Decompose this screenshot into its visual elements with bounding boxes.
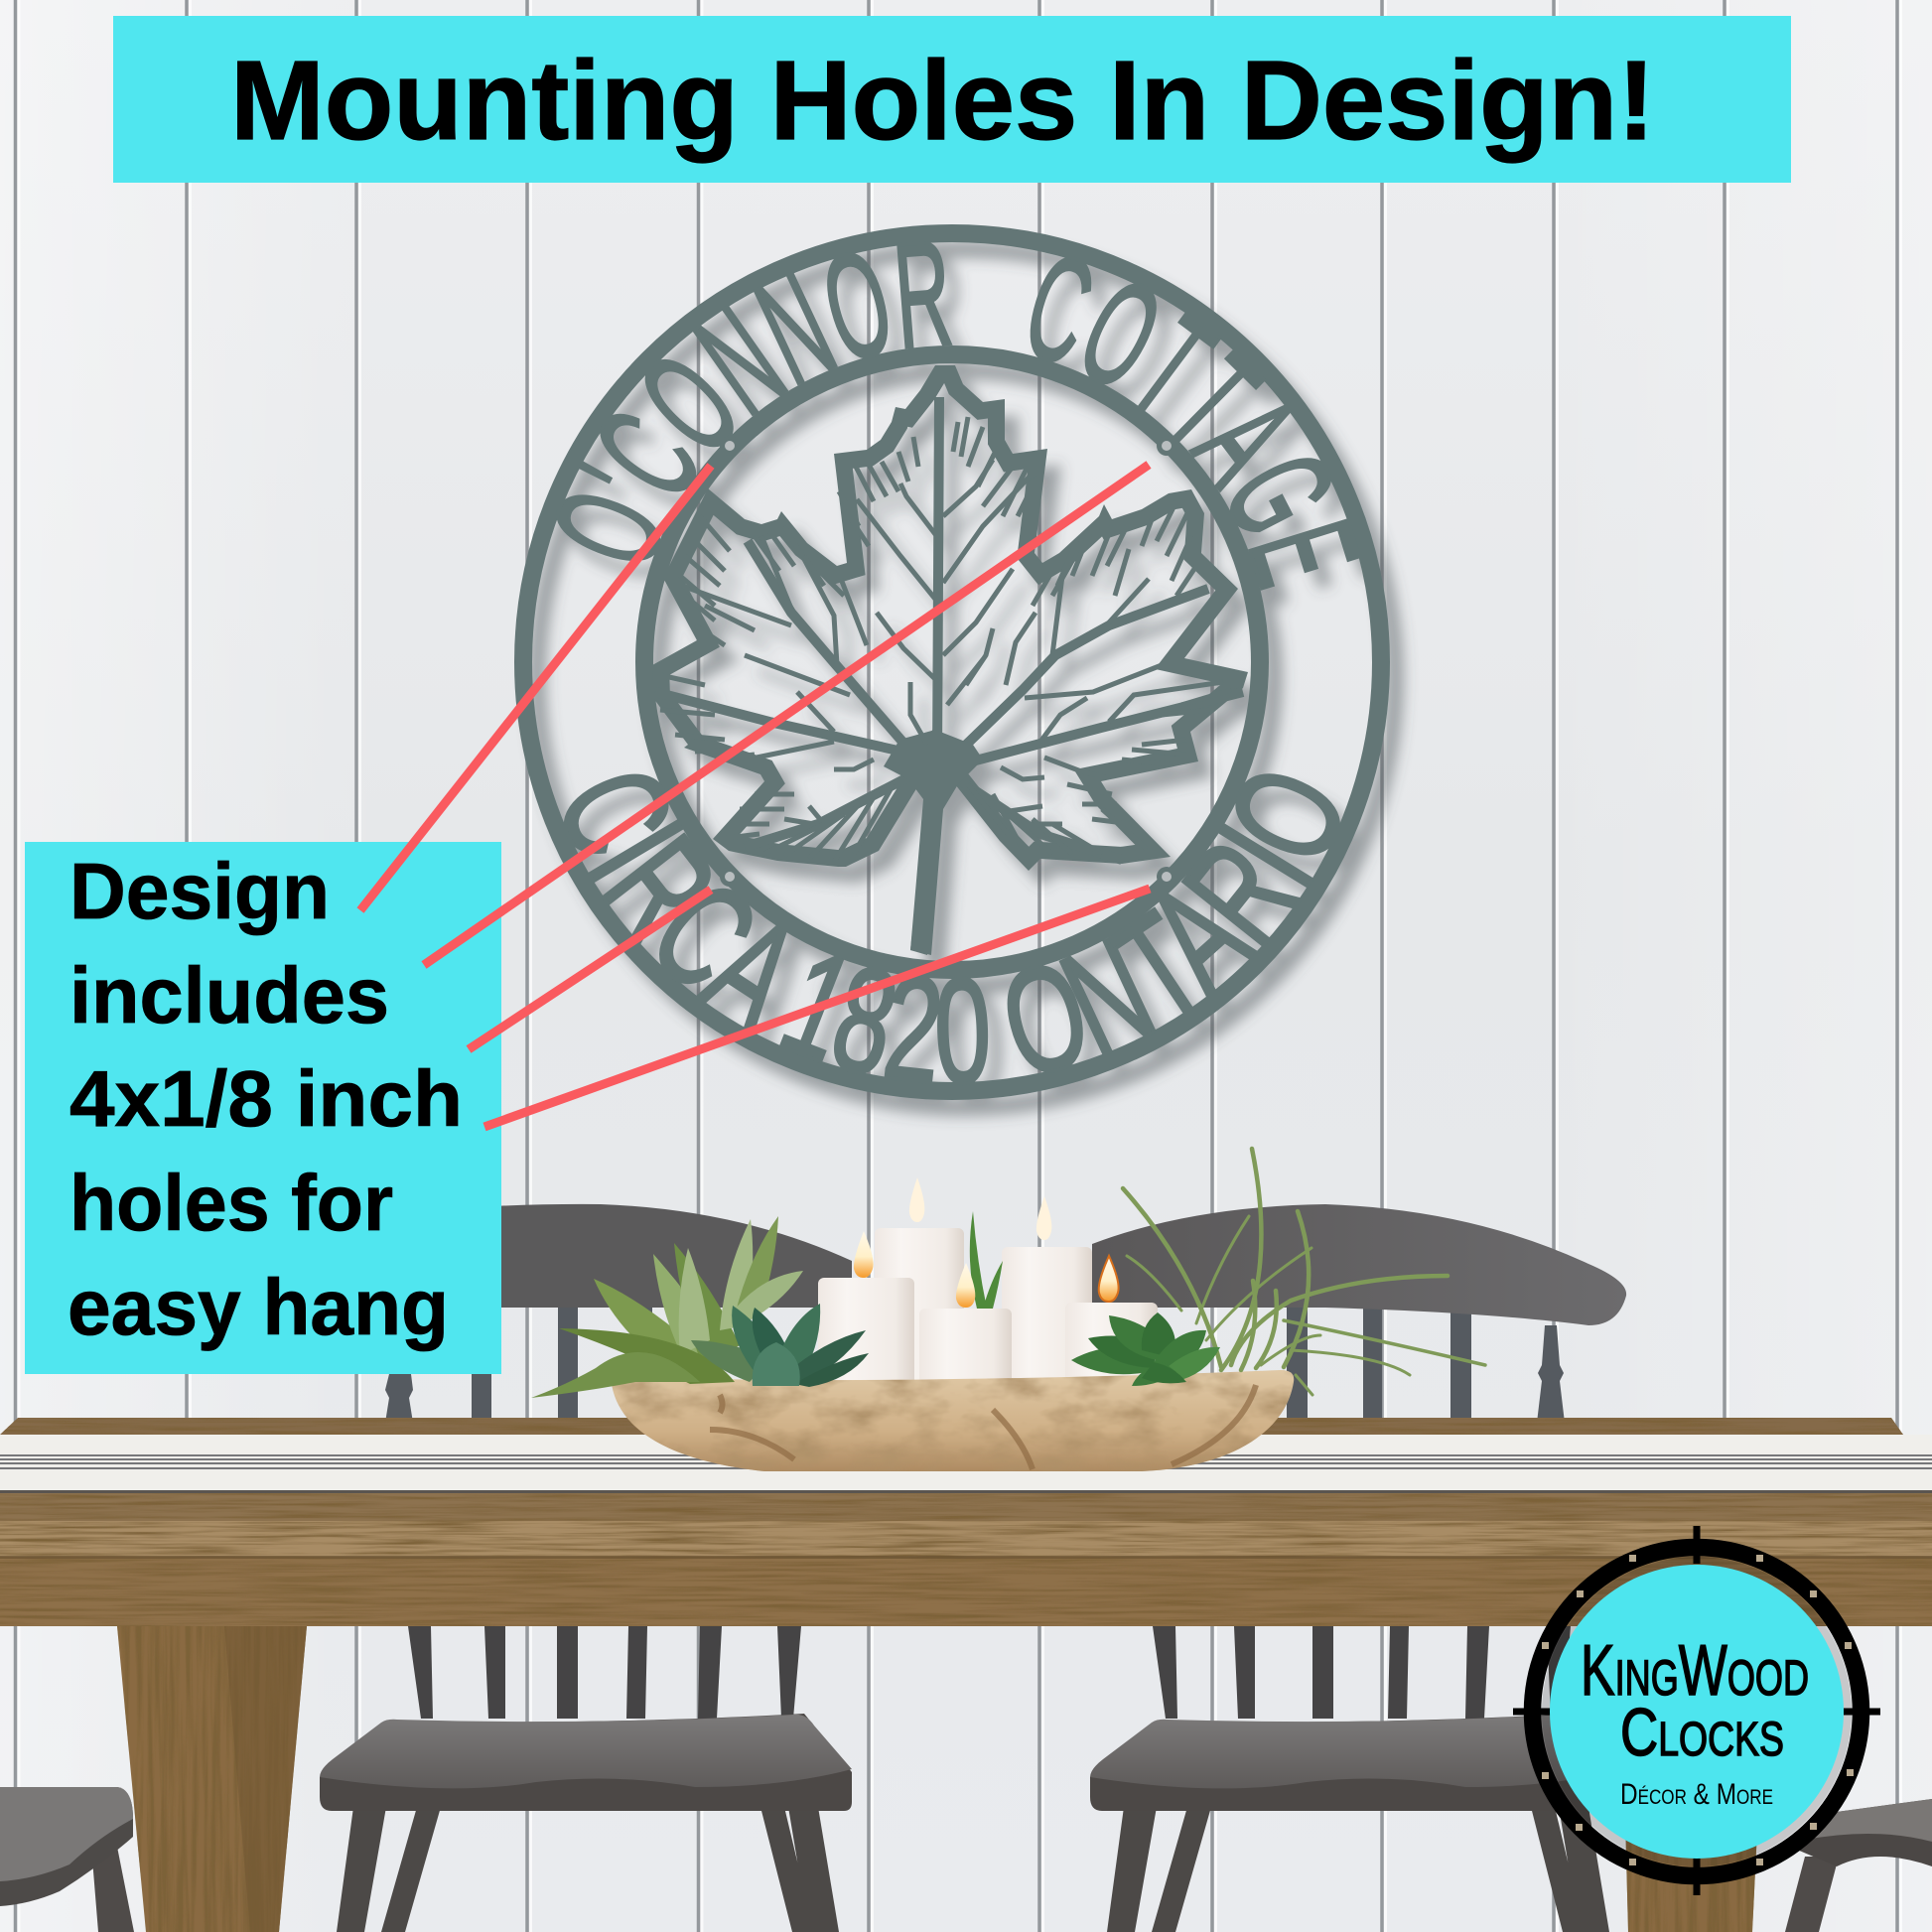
dining chairs below table <box>0 1626 1932 1932</box>
leaf margin band <box>652 365 1248 955</box>
title banner <box>113 16 1791 183</box>
leaf edge hatching <box>660 417 1231 862</box>
centerpiece: candles, plants, wooden bowl <box>531 1149 1485 1471</box>
maple leaf <box>652 365 1248 955</box>
logo text <box>1581 1631 1809 1811</box>
table top and runner <box>0 1418 1932 1626</box>
callout text: includes <box>69 951 389 1039</box>
sign lettering: top arc: O'CONNOR COTTAGE <box>557 242 1380 613</box>
mounting tabs with holes <box>720 436 1176 887</box>
far chairs behind table: spindles and posts <box>385 1291 1565 1425</box>
far-right chair <box>1785 1799 1932 1932</box>
logo text: Clocks <box>1620 1695 1784 1770</box>
centre-right chair <box>1090 1626 1622 1932</box>
sign rings <box>523 233 1381 1091</box>
callout text: easy hang <box>68 1263 449 1351</box>
callout text <box>68 847 463 1351</box>
right succulent rosette <box>1071 1312 1220 1386</box>
table legs <box>117 1626 1767 1932</box>
flames <box>854 1231 874 1278</box>
callout text: Design <box>69 847 330 935</box>
logo text: Décor & More <box>1620 1778 1773 1811</box>
leaf main veins <box>655 397 1243 860</box>
logo: KingWood Clocks badge <box>1513 1526 1880 1895</box>
callout text: 4x1/8 inch <box>69 1054 463 1143</box>
logo ring studs <box>1542 1555 1854 1865</box>
leaf stem and centre <box>884 730 983 955</box>
far-left chair <box>0 1787 134 1932</box>
leaf side veins <box>682 460 1223 824</box>
sign lettering: bottom arc: CIRCA 1820 ONTARIO <box>564 773 1361 1107</box>
right chair back rail <box>1092 1204 1626 1325</box>
arrows: red pointer lines to mounting holes <box>360 465 1150 1127</box>
left chair back rail <box>397 1204 852 1308</box>
wooden bowl <box>612 1370 1294 1471</box>
metal sign: O'Connor Cottage maple leaf <box>514 224 1412 1124</box>
callout text: holes for <box>69 1159 393 1247</box>
centre-left chair <box>320 1626 852 1932</box>
logo text: KingWood <box>1581 1631 1809 1711</box>
left agave plant <box>531 1216 803 1398</box>
dark aloe rosette <box>691 1304 869 1387</box>
title text: Mounting Holes In Design! <box>230 38 1655 163</box>
callout panel: mounting holes note <box>25 842 501 1374</box>
candles <box>818 1177 1158 1388</box>
right air plant grass <box>1123 1149 1485 1395</box>
